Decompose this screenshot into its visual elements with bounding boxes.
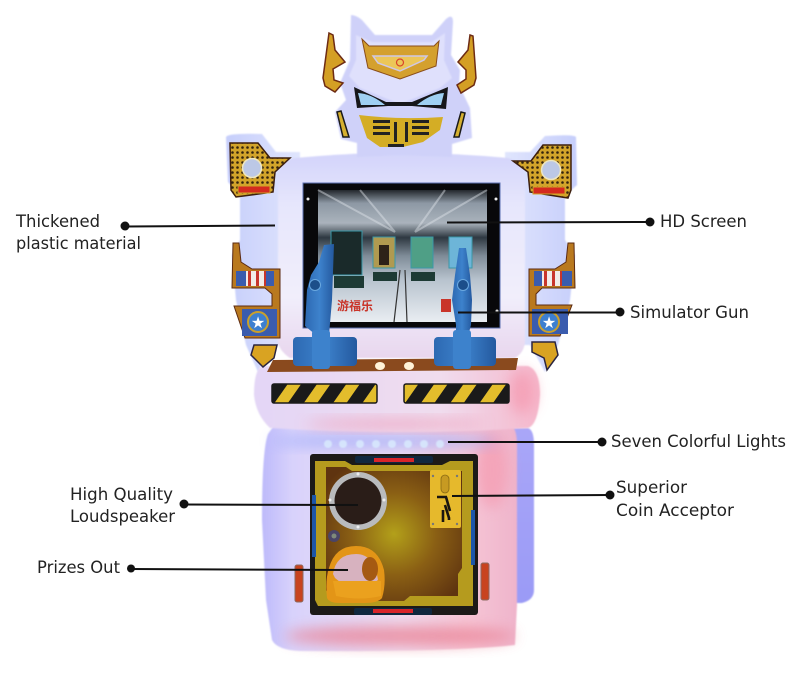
callout: superior coin acceptor: Coin Acceptor <box>616 501 734 520</box>
game cards <box>331 231 472 288</box>
right small badge <box>532 342 558 370</box>
icon: loudspeaker <box>328 472 387 530</box>
small button <box>328 530 340 542</box>
hazard stripes right <box>404 384 509 403</box>
arcade machine <box>226 15 577 651</box>
head <box>335 15 472 157</box>
right wing <box>505 135 577 372</box>
callout: high quality loudspeaker: High Quality <box>70 485 173 504</box>
right star panel: ★ <box>542 313 556 332</box>
callout: thickened plastic material <box>15 212 275 253</box>
hazard stripes left <box>272 384 377 403</box>
right simulator gun <box>434 248 496 369</box>
callout: simulator gun: Simulator Gun <box>630 303 749 322</box>
left ear <box>323 33 345 92</box>
left shoulder badge <box>230 143 290 197</box>
robot mouth <box>359 115 443 147</box>
game title: 游福乐 <box>337 297 373 314</box>
counter <box>254 366 540 432</box>
left wing <box>226 134 300 372</box>
callout: thickened plastic material: Thickened <box>15 212 100 231</box>
right ear <box>457 35 476 93</box>
head crest <box>362 39 439 79</box>
side indicator left <box>295 565 303 602</box>
callout: prizes out: Prizes Out <box>37 558 121 577</box>
robot eyes <box>354 87 448 109</box>
callout: HD screen: HD Screen <box>660 212 747 231</box>
HD screen <box>303 183 500 328</box>
lower cabinet back side <box>505 428 534 603</box>
callout: high quality loudspeaker <box>70 485 358 526</box>
lower cabinet <box>262 424 517 651</box>
left star panel: ★ <box>251 313 265 332</box>
callout: HD screen <box>447 212 747 231</box>
callout: thickened plastic material: plastic material <box>16 234 141 253</box>
right star panel <box>529 243 575 336</box>
right shoulder badge <box>513 145 571 198</box>
left small badge <box>251 345 277 367</box>
callout: superior coin acceptor: Superior <box>616 478 687 497</box>
cheek vents <box>337 111 349 137</box>
callout: simulator gun <box>458 303 749 322</box>
icon: prize outlet <box>326 546 385 603</box>
cabinet panel <box>310 454 478 615</box>
seven colorful lights <box>324 440 444 448</box>
callout: superior coin acceptor <box>452 478 734 520</box>
callout: seven colorful lights <box>448 432 786 451</box>
callout: high quality loudspeaker: Loudspeaker <box>70 507 175 526</box>
icon: coin acceptor <box>430 470 461 528</box>
main frame <box>278 153 525 358</box>
callout: seven colorful lights: Seven Colorful Lights <box>611 432 786 451</box>
brown counter top <box>267 358 518 372</box>
side indicator right <box>481 563 489 600</box>
callout: prizes out <box>37 558 348 577</box>
left simulator gun <box>293 244 357 369</box>
panel lights <box>355 456 433 463</box>
left star panel <box>232 243 280 338</box>
